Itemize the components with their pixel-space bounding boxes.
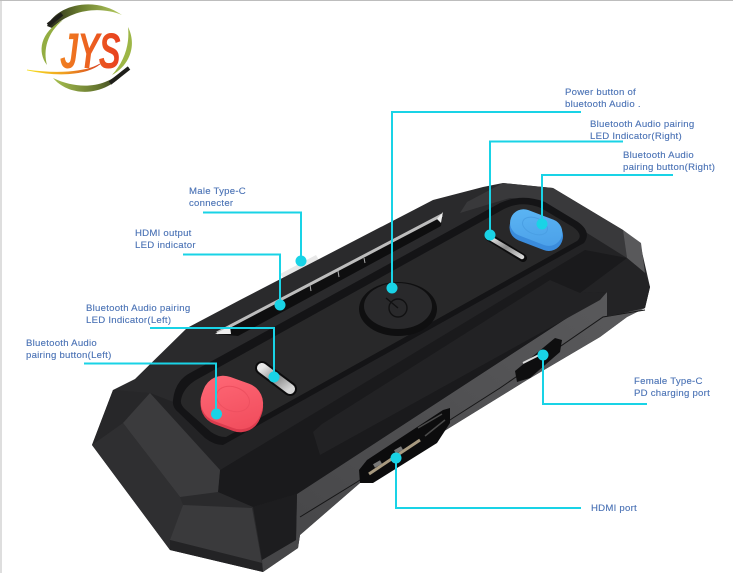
callout: Power button of bluetooth Audio: Power button of — [565, 87, 636, 98]
body silhouette — [92, 183, 650, 572]
corner facet: left lower — [92, 423, 183, 550]
callout: Male Type-C connecter: connecter — [189, 198, 234, 209]
top right bevel facet — [460, 183, 627, 258]
side groove line — [300, 310, 645, 517]
callout: Bluetooth Audio pairing button(Right): Bluetooth Audio — [623, 150, 694, 161]
callout: Female Type-C PD charging port: Female Type-C — [634, 376, 703, 387]
button: Bluetooth left, red — [195, 370, 269, 438]
callout: Bluetooth Audio pairing button(Right) — [536, 150, 715, 230]
lower dark bevel band — [218, 245, 627, 507]
callout: Bluetooth Audio pairing LED Indicator(Right): Bluetooth Audio pairing — [590, 119, 694, 130]
callout: HDMI output LED indicator — [135, 228, 286, 310]
callout: HDMI port — [390, 452, 637, 514]
callout: Bluetooth Audio pairing LED Indicator(Right): LED Indicator(Right) — [590, 131, 682, 142]
right corner dark facet — [580, 258, 650, 317]
right corner light facet — [623, 230, 645, 273]
logo: JYS: JYS — [60, 23, 120, 79]
callout: HDMI output LED indicator: HDMI output — [135, 228, 192, 239]
corner facet: bottom — [170, 505, 262, 563]
front dark lower panel — [253, 494, 297, 560]
rear male connector hint — [280, 255, 320, 280]
callout: Bluetooth Audio pairing button(Left) — [26, 338, 222, 420]
button: power — [359, 282, 437, 336]
callout: Bluetooth Audio pairing button(Right): pairing button(Right) — [623, 162, 715, 173]
corner facet: left top — [92, 390, 150, 445]
callout: Female Type-C PD charging port — [538, 350, 710, 404]
callout: Bluetooth Audio pairing LED Indicator(Left) — [86, 303, 280, 382]
callout: Male Type-C connecter — [189, 186, 306, 266]
callout: Power button of bluetooth Audio: bluetooth Audio . — [565, 99, 641, 110]
corner facet: bottom strip — [170, 540, 263, 572]
callout: Power button of bluetooth Audio — [386, 87, 641, 294]
callout: Bluetooth Audio pairing button(Left): Bluetooth Audio — [26, 338, 97, 349]
callout: HDMI port: HDMI port — [591, 503, 637, 514]
raised bar — [313, 280, 607, 455]
Female Type-C port — [515, 338, 562, 382]
callout: Bluetooth Audio pairing LED Indicator(Left): LED Indicator(Left) — [86, 315, 171, 326]
LED indicator right — [489, 237, 523, 258]
LED indicator left — [262, 368, 290, 389]
callout: Bluetooth Audio pairing LED Indicator(Left): Bluetooth Audio pairing — [86, 303, 190, 314]
corner facet: front light — [123, 393, 220, 497]
grey side face — [262, 292, 645, 572]
callout: Female Type-C PD charging port: PD charging port — [634, 388, 710, 399]
top surface below panel — [150, 225, 627, 470]
device body — [92, 183, 650, 572]
callout: HDMI output LED indicator: LED indicator — [135, 240, 196, 251]
logo: JYS — [27, 4, 132, 92]
top panel inset — [173, 198, 587, 445]
HDMI port — [359, 408, 450, 483]
callout: Bluetooth Audio pairing LED Indicator(Right) — [484, 119, 694, 240]
slot: HDMI output LED indicator — [215, 212, 443, 336]
callout: Bluetooth Audio pairing button(Left): pairing button(Left) — [26, 350, 112, 361]
button: Bluetooth right, blue — [505, 205, 567, 255]
callout: Male Type-C connecter: Male Type-C — [189, 186, 246, 197]
